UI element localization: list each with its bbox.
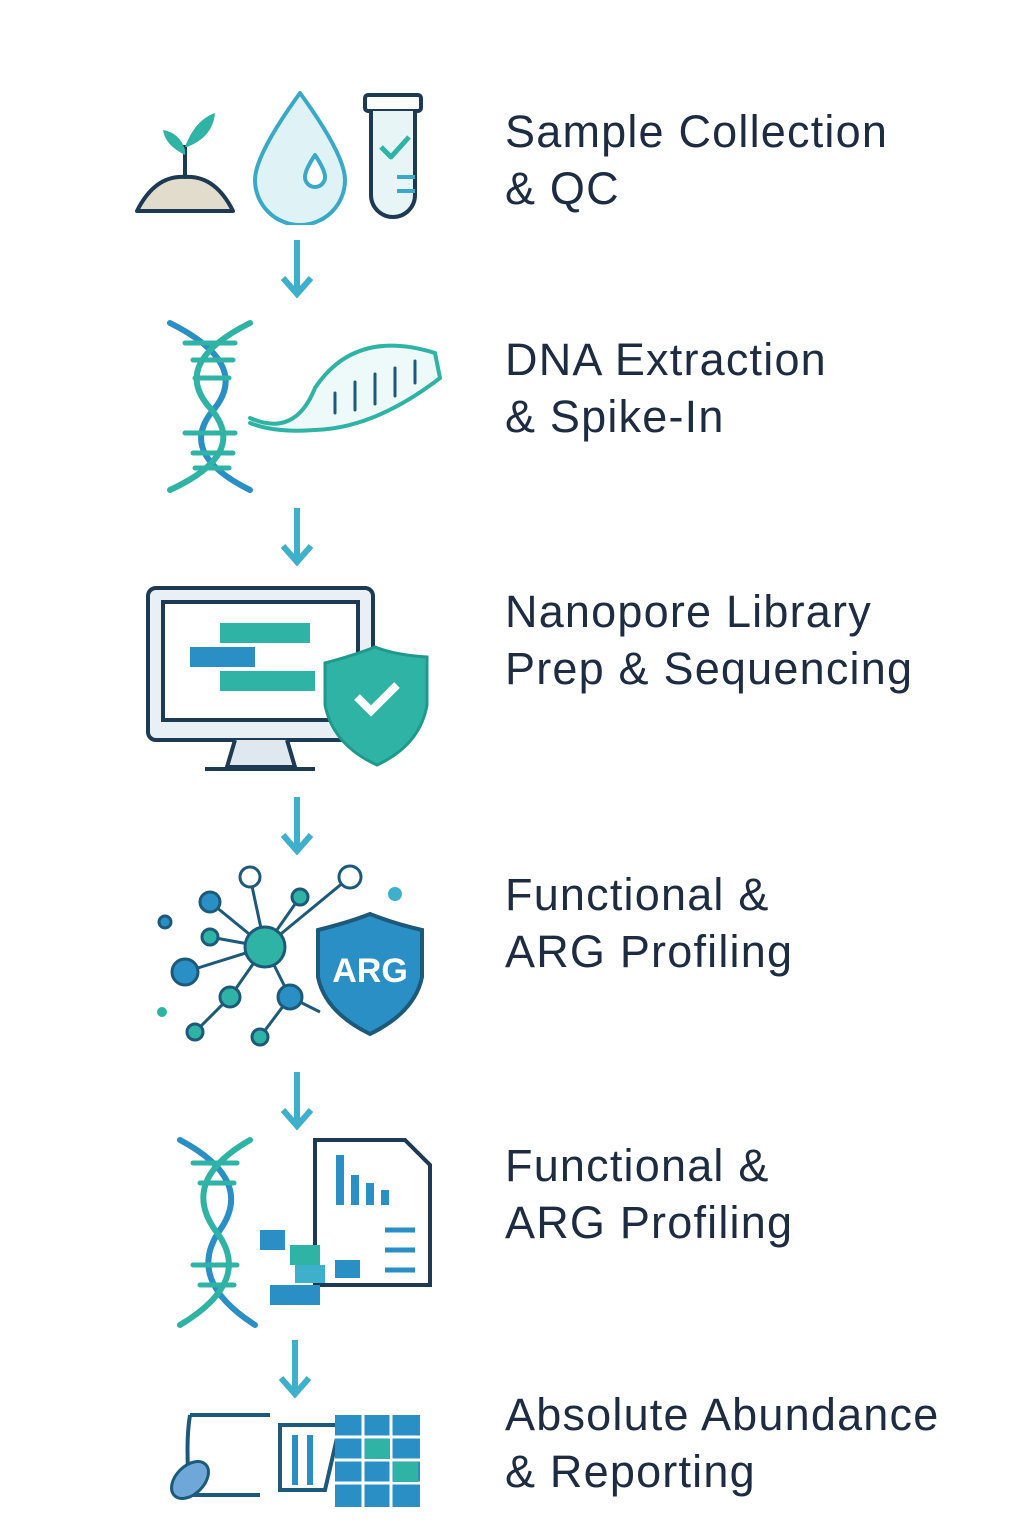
text: step 4: Functional & xyxy=(505,869,770,920)
text: step 3: Prep & Sequencing xyxy=(505,643,913,694)
icon: network ARG: ARG xyxy=(332,952,408,990)
text: step 2: DNA Extraction xyxy=(505,334,827,385)
arrow 2 xyxy=(280,508,314,566)
text: step 3 xyxy=(505,586,913,694)
text: step 6: & Reporting xyxy=(505,1446,756,1497)
text: step 4: ARG Profiling xyxy=(505,926,793,977)
arrow 3 xyxy=(280,797,314,856)
icon: DNA extraction xyxy=(167,320,442,493)
text: step 2: & Spike-In xyxy=(505,391,725,442)
arrow 5 xyxy=(278,1340,312,1398)
text: step 5: ARG Profiling xyxy=(505,1197,793,1248)
text: step 4 xyxy=(505,869,793,977)
text: step 5 xyxy=(505,1140,793,1248)
text: step 5: Functional & xyxy=(505,1140,770,1191)
text: step 1: & QC xyxy=(505,163,620,214)
text: step 1: Sample Collection xyxy=(505,106,888,157)
text: step 6: Absolute Abundance xyxy=(505,1389,939,1440)
icon: sample collection xyxy=(135,90,423,225)
icon: abundance table xyxy=(170,1413,420,1507)
text: step 3: Nanopore Library xyxy=(505,586,872,637)
text: step 1 xyxy=(505,106,888,214)
icon: network ARG xyxy=(157,864,424,1046)
arrow 1 xyxy=(280,240,314,298)
icon: sequencing monitor xyxy=(146,586,428,771)
arrow 4 xyxy=(280,1072,314,1130)
text: step 6 xyxy=(505,1389,939,1497)
icon: DNA + report xyxy=(177,1137,432,1328)
text: step 2 xyxy=(505,334,827,442)
